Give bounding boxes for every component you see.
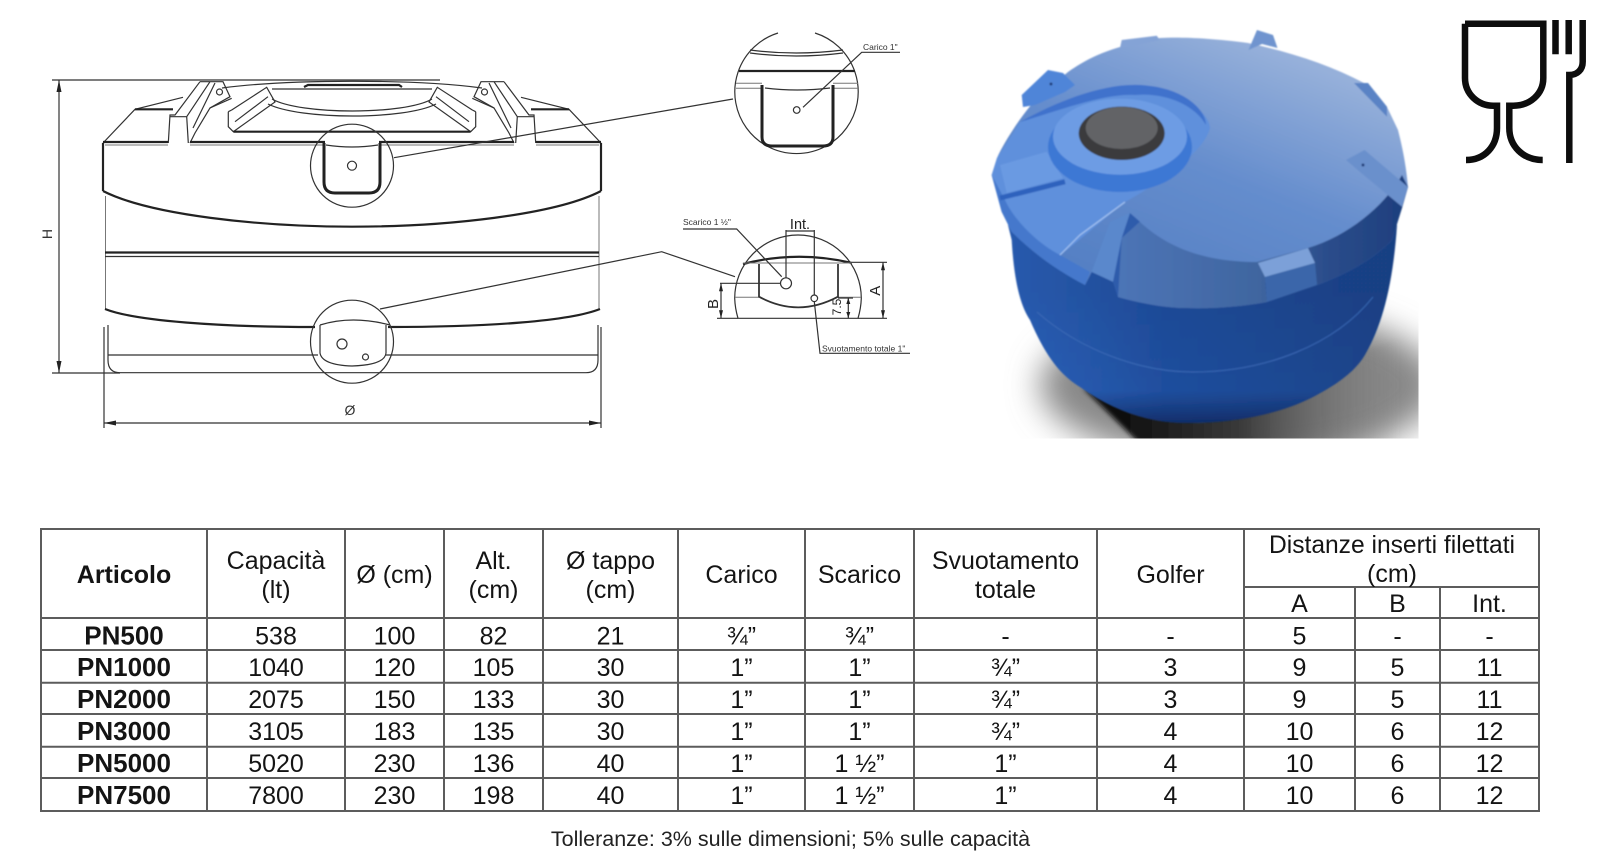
table header: Capacità: [227, 547, 325, 575]
row: PN7500: 7800: [248, 782, 304, 810]
dimension: 7.5: [830, 298, 853, 318]
row: PN2000: 150: [374, 686, 415, 714]
table header: Ø (cm): [356, 561, 433, 589]
lugs: [1022, 30, 1408, 302]
table: tank specifications: [41, 529, 1539, 811]
row: PN1000: 105: [473, 654, 514, 682]
row: PN500: 5: [1293, 622, 1306, 650]
row: PN3000: 12: [1476, 718, 1503, 746]
table header: Int.: [1472, 590, 1507, 618]
detail dome: [735, 235, 861, 318]
callout circle: discharge connection: [310, 300, 394, 383]
tank outline: left shoulder and handle: [103, 82, 325, 191]
cap ring: [1048, 99, 1192, 192]
row: PN5000: 1”: [994, 750, 1017, 778]
row: PN3000: 3105: [248, 718, 304, 746]
table header: Golfer: [1136, 561, 1205, 589]
row: PN3000: 30: [597, 718, 624, 746]
row: PN3000: 10: [1286, 718, 1313, 746]
table header: [77, 532, 1515, 618]
dimension: height H: [39, 80, 440, 373]
row: PN1000: [77, 652, 1502, 682]
row: PN500: -: [1393, 622, 1402, 650]
row: PN1000: 1”: [848, 654, 871, 682]
row: PN2000: 5: [1391, 686, 1404, 714]
lid wedge groove: [1000, 182, 1065, 198]
row: PN1000: 9: [1293, 654, 1306, 682]
lid curved channel: [1020, 85, 1206, 125]
table grid: [41, 529, 1539, 811]
label: Svuotamento totale: [814, 302, 910, 354]
label: Carico 1: Carico 1": [863, 42, 898, 52]
panel: load connection detail: [735, 33, 900, 154]
row: PN7500: 12: [1476, 782, 1503, 810]
row: PN500: 100: [374, 622, 415, 650]
row: PN7500: 1”: [994, 782, 1017, 810]
tank outline: right shoulder and handle: [379, 82, 601, 191]
table header: A: [1291, 590, 1308, 618]
callout circle: load connection: [310, 124, 394, 207]
row: PN2000: 3: [1164, 686, 1177, 714]
row: PN5000: 1 ½”: [834, 750, 885, 778]
dimension: height H: H: [39, 229, 55, 239]
row: PN500: 82: [480, 622, 507, 650]
row: PN2000: 30: [597, 686, 624, 714]
row: PN5000: 10: [1286, 750, 1313, 778]
row: PN2000: 1”: [848, 686, 871, 714]
row: PN1000: 30: [597, 654, 624, 682]
detail interior lines: [735, 257, 861, 307]
dimension: B: B: [705, 299, 722, 309]
label: Carico 1: [803, 42, 900, 107]
row: PN7500: 6: [1391, 782, 1404, 810]
row: PN5000: [77, 748, 1503, 778]
dimension: Int.: [786, 217, 814, 295]
row: PN1000: 3: [1164, 654, 1177, 682]
row: PN3000: 1”: [730, 718, 753, 746]
row: PN1000: 5: [1391, 654, 1404, 682]
row: PN2000: 9: [1293, 686, 1306, 714]
row: PN7500: 40: [597, 782, 624, 810]
row: PN3000: ¾”: [991, 718, 1020, 746]
row: PN7500: 198: [473, 782, 514, 810]
row: PN500: -: [1001, 622, 1010, 650]
row: PN1000: ¾”: [991, 654, 1020, 682]
lid left recessed area: [992, 88, 1210, 255]
row: PN7500: PN7500: [77, 780, 171, 810]
table header: Svuotamento: [932, 547, 1079, 575]
label: Svuotamento totale: Svuotamento totale 1": [822, 344, 905, 354]
detail circle: [735, 33, 858, 154]
row: PN500: 21: [597, 622, 624, 650]
row: PN5000: 12: [1476, 750, 1503, 778]
tank outline: central lid recess: [222, 81, 482, 132]
dimension: B: [705, 283, 781, 318]
row: PN7500: 230: [374, 782, 415, 810]
tank outline: body and base: [103, 191, 601, 373]
row: PN7500: 10: [1286, 782, 1313, 810]
lid: [992, 38, 1408, 308]
row: PN500: -: [1485, 622, 1494, 650]
dimension: Int.: Int.: [790, 217, 810, 233]
row: PN500: PN500: [84, 620, 164, 650]
row: PN500: ¾”: [845, 622, 874, 650]
photo: blue tank rendering: [992, 30, 1440, 463]
row: PN3000: 135: [473, 718, 514, 746]
table header: B: [1389, 590, 1406, 618]
table header: Articolo: [77, 561, 171, 589]
dimension: diameter: Ø: [345, 402, 356, 418]
row: PN7500: 4: [1164, 782, 1178, 810]
dimension: A: A: [867, 286, 884, 296]
dimension: A: [852, 262, 887, 318]
row: PN5000: 5020: [248, 750, 304, 778]
row: PN7500: 1 ½”: [834, 782, 885, 810]
ground shadow: [1020, 308, 1418, 438]
row: PN7500: [77, 780, 1503, 810]
row: PN3000: 183: [374, 718, 415, 746]
row: PN7500: 1”: [730, 782, 753, 810]
row: PN5000: 1”: [730, 750, 753, 778]
panel: front technical drawing of the tank: [39, 80, 735, 428]
row: PN2000: [77, 684, 1502, 714]
table header: Scarico: [818, 561, 901, 589]
label: Scarico: Scarico 1 ½": [683, 217, 731, 227]
lid skirt band: [1118, 175, 1408, 308]
row: PN2000: 133: [473, 686, 514, 714]
dimension: diameter: [104, 327, 601, 428]
row: PN2000: 1”: [730, 686, 753, 714]
lid left lower rim: [992, 175, 1090, 285]
lid left wedge: [1000, 152, 1063, 193]
tank body: [1007, 224, 1398, 424]
panel: discharge connection detail: [683, 217, 910, 354]
row: PN5000: 4: [1164, 750, 1178, 778]
footnote: tolerances: Tolleranze: 3% sulle dimensioni; 5% sulle capacità: [551, 827, 1030, 851]
label: Scarico: [683, 217, 782, 277]
row: PN500: [84, 620, 1494, 650]
row: PN3000: PN3000: [77, 716, 171, 746]
row: PN1000: 120: [374, 654, 415, 682]
table header: Carico: [705, 561, 778, 589]
row: PN5000: PN5000: [77, 748, 171, 778]
row: PN2000: PN2000: [77, 684, 171, 714]
row: PN5000: 6: [1391, 750, 1404, 778]
row: PN2000: 11: [1477, 686, 1502, 714]
row: PN1000: 1040: [248, 654, 304, 682]
leader line to discharge detail: [380, 252, 735, 309]
dimension: 7.5: 7.5: [830, 298, 844, 315]
row: PN5000: 230: [374, 750, 415, 778]
row: PN500: 538: [255, 622, 297, 650]
table header: (cm): [586, 576, 635, 604]
table header: (cm): [1367, 560, 1417, 588]
table header: totale: [975, 576, 1036, 604]
row: PN1000: 11: [1477, 654, 1502, 682]
table header: Distanze inserti filettati: [1269, 532, 1515, 559]
row: PN5000: 40: [597, 750, 624, 778]
cap: [1079, 107, 1165, 160]
row: PN1000: PN1000: [77, 652, 171, 682]
lid channel highlight: [1060, 202, 1125, 255]
table header: Ø tappo: [566, 547, 655, 575]
row: PN2000: 2075: [248, 686, 304, 714]
detail interior lines: [736, 50, 858, 146]
row: PN500: -: [1166, 622, 1175, 650]
leader line to load detail: [394, 99, 733, 158]
row: PN3000: [77, 716, 1503, 746]
row: PN2000: ¾”: [991, 686, 1020, 714]
table header: (lt): [261, 576, 291, 604]
table header: Alt.: [475, 547, 512, 575]
row: PN3000: 4: [1164, 718, 1178, 746]
row: PN3000: 1”: [848, 718, 871, 746]
icon: food-safe glass and fork: [1465, 20, 1583, 163]
table header: (cm): [469, 576, 518, 604]
row: PN1000: 1”: [730, 654, 753, 682]
row: PN3000: 6: [1391, 718, 1404, 746]
row: PN5000: 136: [473, 750, 514, 778]
row: PN500: ¾”: [727, 622, 756, 650]
